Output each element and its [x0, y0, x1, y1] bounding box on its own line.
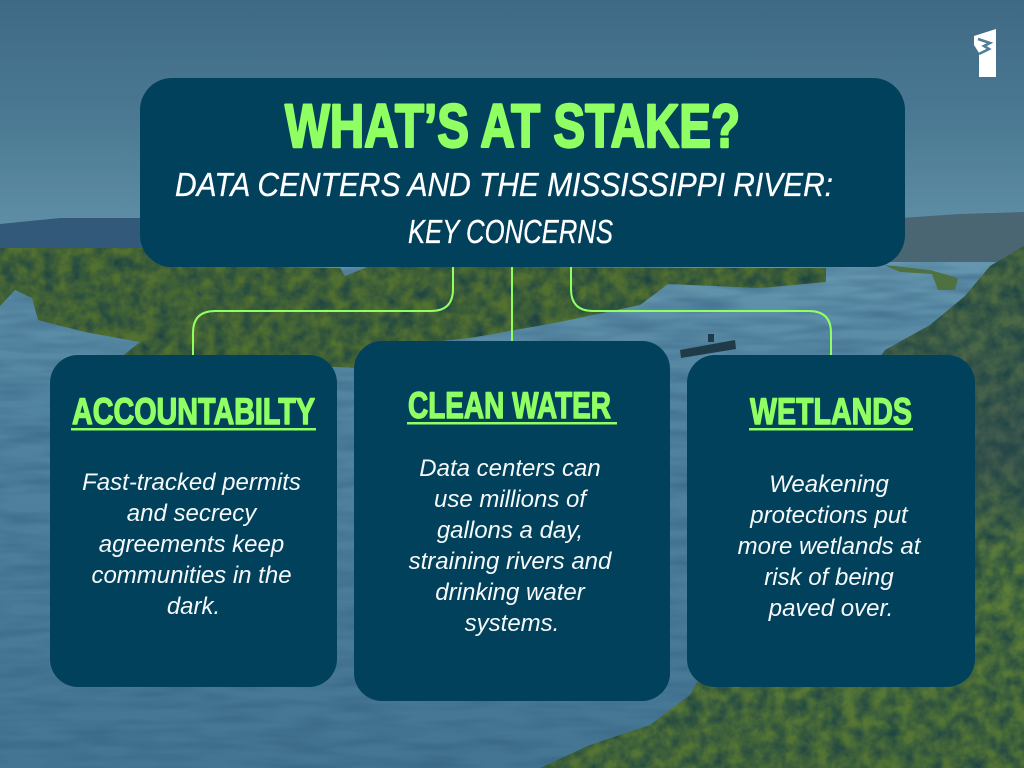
text: accountability description: agreements keep: [99, 531, 284, 558]
subtitle line 2: KEY CONCERNS: [408, 213, 613, 250]
text: accountability description: communities in the: [91, 562, 292, 589]
text: clean water description: gallons a day,: [437, 517, 583, 544]
text: accountability description: and secrecy: [127, 500, 258, 527]
text: wetlands description: protections put: [749, 502, 909, 529]
text: accountability description: Fast-tracked permits: [82, 469, 301, 496]
title: WHAT’S AT STAKE?: [285, 92, 740, 160]
heading: clean water: CLEAN WATER: [408, 385, 611, 426]
heading: wetlands: WETLANDS: [750, 391, 912, 432]
text: clean water description: Data centers can: [419, 455, 601, 482]
text: clean water description: drinking water: [435, 579, 586, 606]
panel: header: [140, 78, 905, 267]
heading: accountability: ACCOUNTABILTY: [72, 391, 315, 432]
connector lines: [193, 267, 831, 355]
panel: accountability: [50, 355, 337, 687]
text: wetlands description: more wetlands at: [738, 533, 922, 560]
text: clean water description: systems.: [465, 610, 559, 637]
text: wetlands description: paved over.: [768, 595, 893, 622]
text: clean water description: use millions of: [434, 486, 588, 513]
panel: clean water: [354, 341, 670, 701]
text: clean water description: straining rivers and: [409, 548, 612, 575]
icon: logo: [974, 29, 996, 77]
panel: wetlands: [687, 355, 975, 687]
text: wetlands description: Weakening: [769, 471, 889, 498]
text: accountability description: dark.: [167, 593, 220, 620]
text: wetlands description: risk of being: [764, 564, 894, 591]
subtitle line 1: DATA CENTERS AND THE MISSISSIPPI RIVER:: [175, 166, 833, 203]
